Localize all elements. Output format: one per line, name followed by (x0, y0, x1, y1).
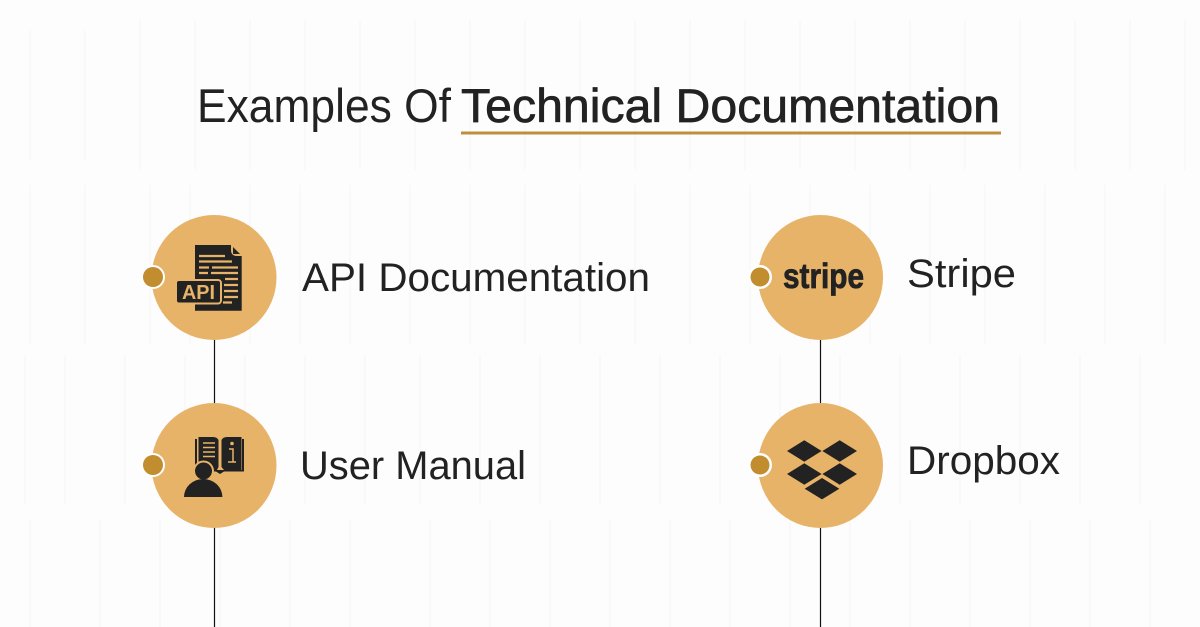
item: Dropbox (748, 403, 1060, 528)
title: Examples Of (197, 79, 452, 132)
item: API Documentation (141, 215, 650, 340)
icon: reader with info book (184, 437, 244, 497)
label: API Documentation (302, 256, 650, 300)
connector: left timeline (214, 335, 216, 627)
connector: right timeline (820, 335, 822, 627)
title (197, 79, 1001, 134)
icon: dropbox logo (787, 440, 857, 499)
icon: API document (176, 245, 242, 311)
item: Stripe (748, 215, 1016, 340)
item: User Manual (141, 403, 526, 528)
label: User Manual (300, 444, 526, 488)
label: Dropbox (907, 439, 1060, 483)
icon: stripe wordmark: stripe (783, 257, 864, 296)
title: Technical Documentation (461, 79, 1000, 132)
icon: API document: API (182, 282, 215, 304)
label: Stripe (907, 252, 1016, 296)
